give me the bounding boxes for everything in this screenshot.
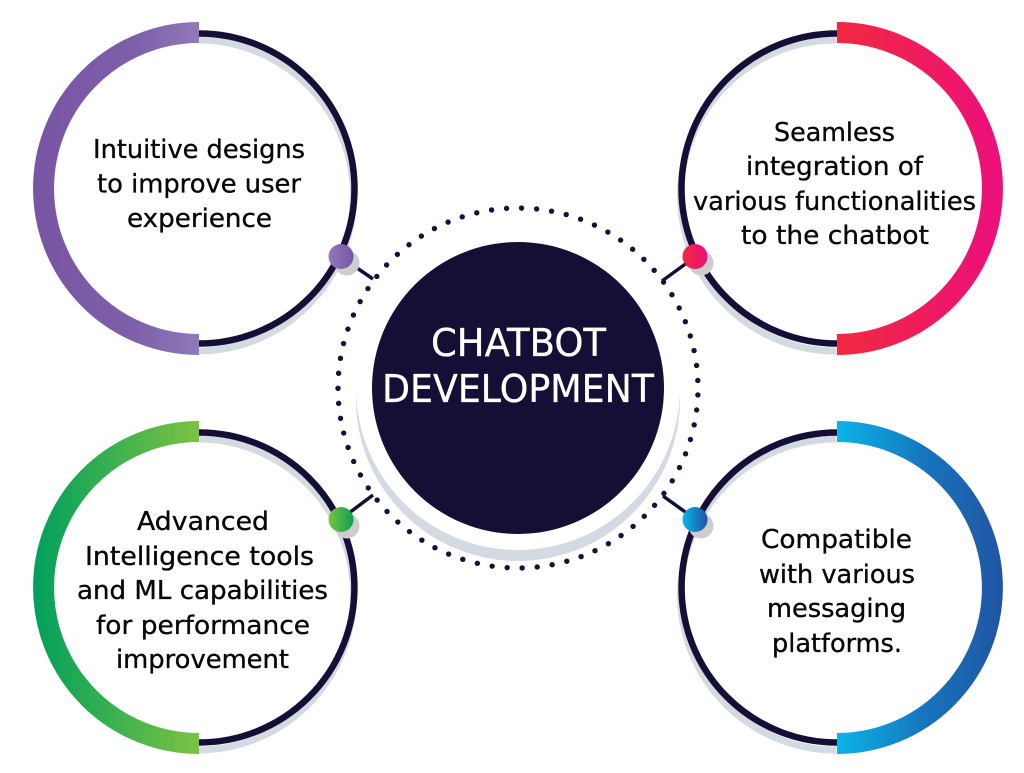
dotted ring [338,208,698,568]
node dot [328,507,354,532]
ring navy arc [682,34,837,344]
label: messaging [767,594,906,624]
label: various functionalities [693,187,976,217]
label: Intelligence tools [85,542,314,572]
label: Seamless [774,118,895,148]
label: to improve user [97,170,302,200]
panel: compatible platforms [663,432,992,750]
title: DEVELOPMENT [382,367,655,411]
label [759,525,915,659]
ring shadow [198,439,354,750]
panel: central hub [338,208,698,568]
hub shadow crescent [356,237,680,561]
hub white halo [356,226,680,550]
connector [663,496,695,519]
label: experience [127,204,272,234]
title [382,321,655,411]
label [93,135,305,234]
label: Intuitive designs [93,135,305,165]
connector [341,257,373,279]
panel: advanced intelligence [44,432,373,750]
label: with various [759,560,915,590]
hub navy circle [372,242,664,534]
ring coloured arc [837,432,992,744]
ring navy arc [682,432,837,742]
label: integration of [746,152,924,182]
node dot [328,244,354,269]
label [693,118,976,251]
label: for performance [96,611,310,641]
node dot [682,507,708,532]
label: improvement [116,645,289,675]
ring coloured arc [44,432,199,744]
label [77,507,328,675]
ring shadow [681,40,836,351]
title: CHATBOT [431,321,607,365]
ring coloured arc [837,32,992,344]
panel: intuitive designs [44,32,373,351]
ring coloured arc [44,32,199,344]
connector [341,495,373,519]
label: Advanced [137,507,269,537]
ring shadow [198,40,353,351]
node dot shadow [688,514,714,538]
ring navy arc [199,432,354,742]
connector [662,257,695,281]
node dot shadow [688,250,714,276]
node dot shadow [334,514,360,538]
node dot shadow [334,250,360,276]
ring shadow [680,439,836,750]
label: to the chatbot [741,221,929,251]
node dot [682,244,708,269]
ring navy arc [199,34,354,344]
label: and ML capabilities [77,576,328,606]
label: Compatible [761,525,912,555]
label: platforms. [772,629,902,659]
panel: seamless integration [662,32,992,351]
